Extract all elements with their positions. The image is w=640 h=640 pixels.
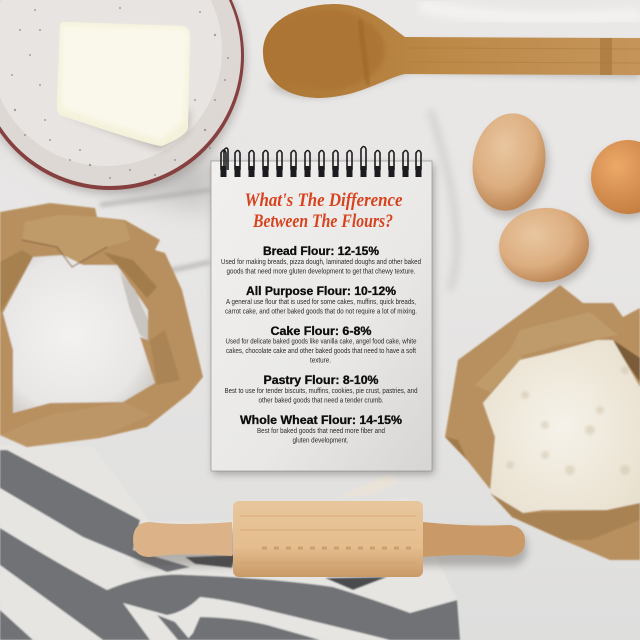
section: bread flour: [221, 246, 421, 276]
section: cake flour: cakes, chocolate cake and other baked goods that need to have a soft: [226, 348, 416, 355]
towel with stripes: [0, 445, 460, 640]
section: whole wheat flour: Best for baked goods that need more fiber and: [257, 428, 385, 435]
section: all purpose flour: All Purpose Flour: 10-12%: [246, 286, 396, 298]
section: whole wheat flour: Whole Wheat Flour: 14-15%: [240, 415, 402, 427]
section: all purpose flour: A general use flour that is used for some cakes, muffins, quick breads,: [226, 299, 416, 306]
section: all purpose flour: carrot cake, and other baked goods that do not require a lot of mixing.: [225, 308, 417, 316]
section: cake flour: Used for delicate baked goods like vanilla cake, angel food cake, white: [226, 338, 417, 346]
title: What's The Difference: [244, 190, 403, 211]
section: cake flour: Cake Flour: 6-8%: [270, 326, 372, 338]
section: whole wheat flour: [240, 415, 402, 444]
left paper bag of sugar: [0, 203, 203, 447]
notepad page: [211, 161, 434, 474]
wooden spoon: [263, 4, 640, 98]
section: whole wheat flour: gluten development.: [292, 438, 349, 444]
section: pastry flour: Pastry Flour: 8-10%: [264, 375, 378, 387]
section: pastry flour: Best to use for tender biscuits, muffins, cookies, pie crust, pastries, and: [224, 388, 418, 395]
notepad: [211, 146, 434, 474]
section: all purpose flour: [225, 286, 417, 316]
section: pastry flour: other baked goods that need a tender crumb.: [258, 398, 384, 404]
rolling pin: [133, 501, 527, 577]
plate with butter: [0, 0, 246, 194]
section: bread flour: Used for making breads, pizza dough, laminated doughs and other baked: [221, 259, 421, 266]
section: bread flour: Bread Flour: 12-15%: [263, 246, 379, 258]
spiral binding: [221, 146, 421, 177]
eggs: [465, 107, 640, 292]
section: pastry flour: [224, 375, 418, 404]
section: bread flour: goods that need more gluten development to get that chewy texture.: [226, 268, 416, 276]
title: Between The Flours?: [252, 211, 393, 232]
section: cake flour: texture.: [310, 358, 331, 364]
right paper bag of flour: [445, 285, 640, 560]
section: cake flour: [226, 326, 417, 364]
title: [244, 190, 403, 232]
